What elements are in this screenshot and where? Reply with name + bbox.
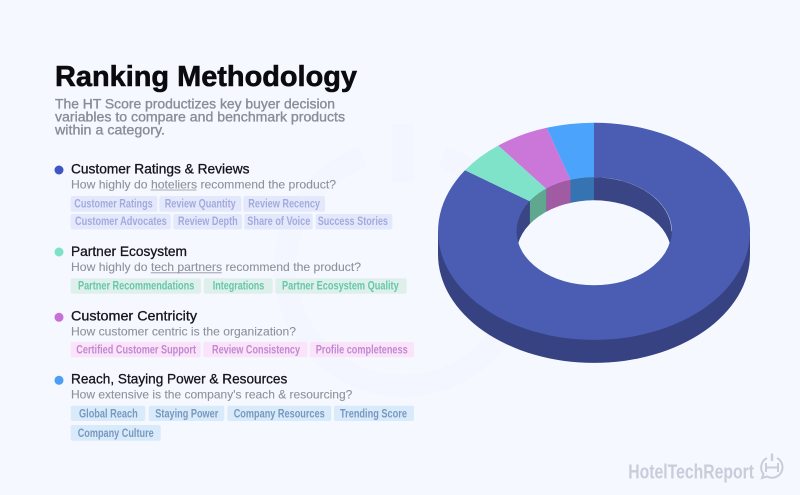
tags: reach xyxy=(71,406,414,441)
tags: customer ratings: Review Quantity xyxy=(165,196,236,210)
icon: power speech bubble xyxy=(761,454,783,478)
tags: customer ratings: Success Stories xyxy=(318,214,388,228)
watermark logo xyxy=(285,124,521,386)
tags: customer ratings: Review Depth xyxy=(178,214,238,228)
panel: customer centricity xyxy=(54,307,414,357)
tags: customer ratings: Share of Voice xyxy=(247,214,311,228)
panel: partner ecosystem xyxy=(54,243,407,294)
heading: partner ecosystem: Partner Ecosystem xyxy=(71,243,187,259)
tags: customer centricity xyxy=(71,342,414,357)
3D donut chart xyxy=(438,123,750,363)
slice: reach xyxy=(547,123,594,180)
tags: partner ecosystem xyxy=(71,278,407,294)
tags: customer ratings: Customer Ratings xyxy=(74,196,153,210)
legend dot: customer centricity xyxy=(54,313,64,322)
tags: partner ecosystem: Partner Recommendations xyxy=(78,279,195,293)
slice: partner ecosystem xyxy=(465,146,546,201)
inner wall xyxy=(516,177,672,286)
tags: customer ratings xyxy=(71,196,392,229)
legend dot: customer ratings xyxy=(54,166,64,174)
title: Ranking Methodology xyxy=(55,61,357,93)
question: partner ecosystem: How highly do tech partners recommend the product? xyxy=(71,260,361,274)
legend dot: partner ecosystem xyxy=(54,248,64,256)
tags: customer ratings: Customer Advocates xyxy=(75,214,167,228)
tags: customer centricity: Review Consistency xyxy=(212,342,300,356)
tags: customer ratings: Review Recency xyxy=(248,196,320,210)
panel: customer ratings and reviews xyxy=(54,160,392,229)
question: customer ratings: How highly do hoteliers recommend the product? xyxy=(71,177,336,191)
tags: reach: Staying Power xyxy=(155,406,219,420)
question: reach: How extensive is the company's reach & resourcing? xyxy=(71,388,353,402)
heading: customer centricity: Customer Centricity xyxy=(71,307,197,323)
tags: partner ecosystem: Partner Ecosystem Quality xyxy=(282,279,399,293)
tags: partner ecosystem: Integrations xyxy=(213,279,265,293)
tags: reach: Global Reach xyxy=(79,406,138,420)
heading: reach: Reach, Staying Power & Resources xyxy=(71,371,287,387)
tags: reach: Company Resources xyxy=(234,406,325,420)
slice: customer ratings xyxy=(438,123,750,340)
tags: reach: Trending Score xyxy=(340,406,407,420)
legend dot: reach xyxy=(54,376,64,385)
tags: customer centricity: Profile completeness xyxy=(316,342,408,356)
question: customer centricity: How customer centric is the organization? xyxy=(71,324,296,338)
tags: reach: Company Culture xyxy=(78,426,154,440)
description: within a category. xyxy=(54,122,165,137)
panel: reach, staying power and resources xyxy=(54,371,414,441)
description: variables to compare and benchmark products xyxy=(55,110,345,124)
description xyxy=(54,97,345,137)
outer side wall xyxy=(438,231,750,363)
tags: customer centricity: Certified Customer Support xyxy=(76,342,196,356)
slice: customer centricity xyxy=(498,128,570,189)
logo: HotelTechReport: HotelTechReport xyxy=(628,460,754,483)
description: The HT Score productizes key buyer decision xyxy=(55,97,335,112)
heading: customer ratings: Customer Ratings & Reviews xyxy=(71,160,250,176)
